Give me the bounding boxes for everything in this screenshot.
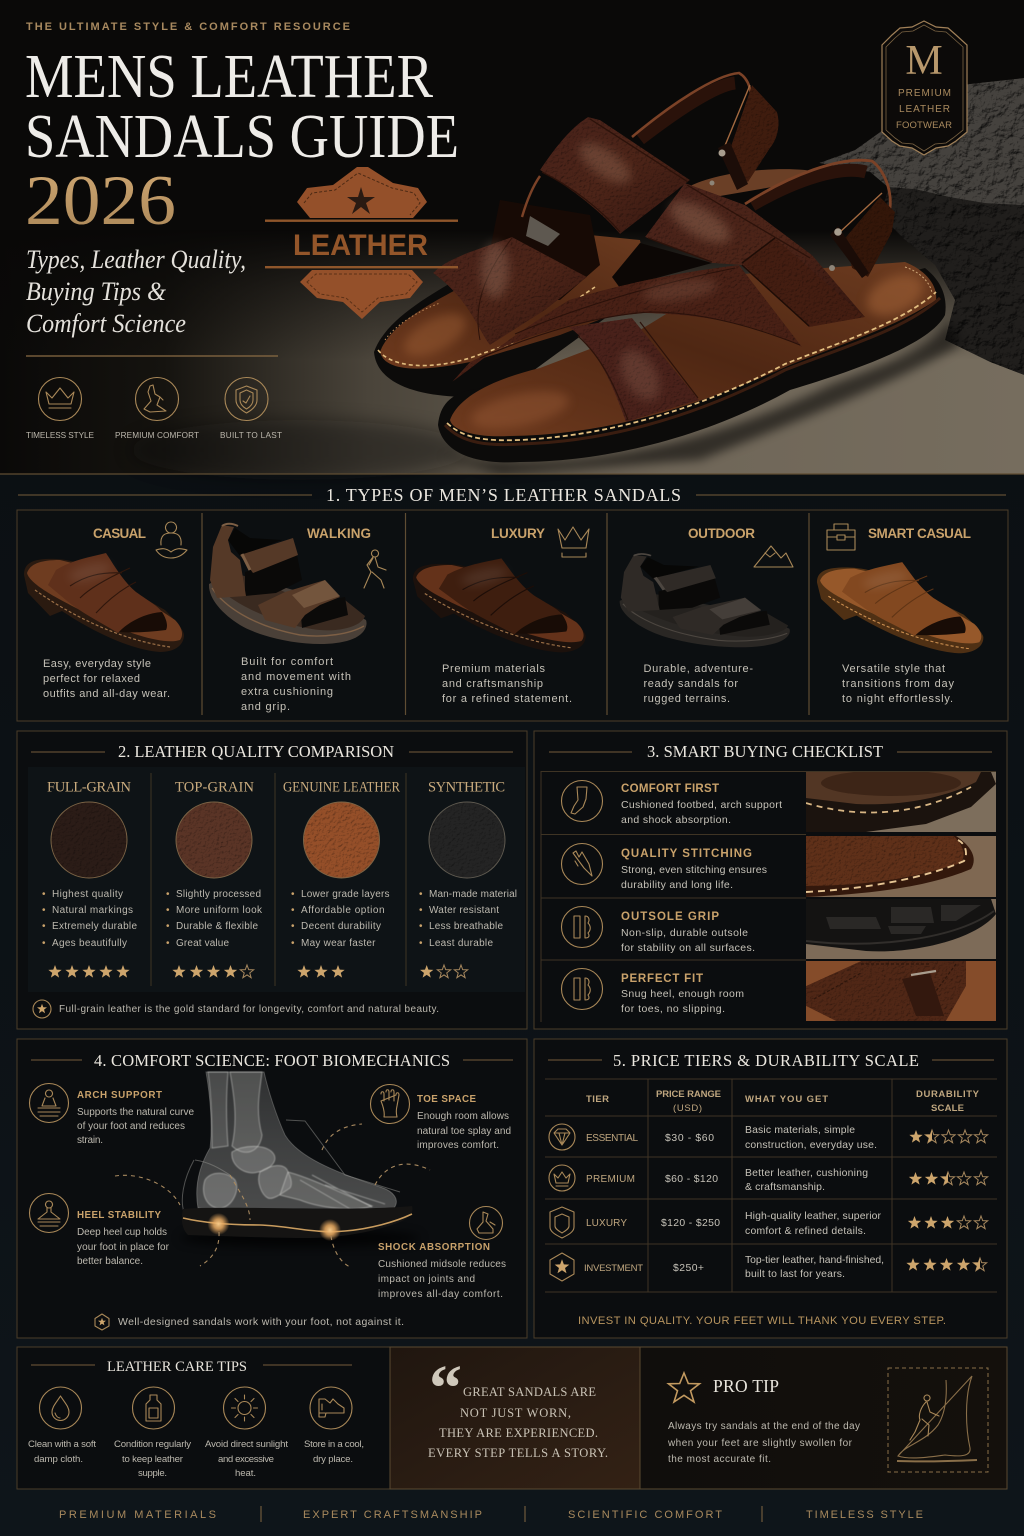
tip: store: dry place. <box>313 1454 353 1465</box>
text: luxury: Premium materials <box>442 663 546 675</box>
row: essential: Basic materials, simple <box>745 1125 855 1136</box>
bullets: genuine leather: Decent durability <box>301 921 381 932</box>
bullets: synthetic: • <box>419 921 423 932</box>
column: full-grain: FULL-GRAIN <box>47 780 132 796</box>
row: luxury: comfort & refined details. <box>745 1226 866 1237</box>
table header: PRICE RANGE <box>656 1089 721 1100</box>
callout: shock absorption <box>378 1206 506 1300</box>
sandal: walking <box>209 524 367 644</box>
bullets: synthetic: • <box>419 905 423 916</box>
text: smart casual: transitions from day <box>842 678 954 690</box>
checklist row: perfect fit: PERFECT FIT <box>621 973 703 985</box>
rock <box>819 78 1024 375</box>
callout: arch support: Supports the natural curve <box>77 1107 194 1118</box>
bullets: genuine leather: • <box>291 921 295 932</box>
bones <box>204 1072 385 1210</box>
row: investment: $250+ <box>673 1263 704 1274</box>
row: investment <box>550 1253 987 1281</box>
bullets: top-grain: More uniform look <box>176 905 263 916</box>
table header: TIER <box>586 1094 609 1105</box>
table header: (USD) <box>673 1103 702 1114</box>
note: gold standard: Full-grain leather is the gold standard for longevity, comfort and natural beauty. <box>59 1004 439 1015</box>
foot silhouette <box>197 1072 396 1215</box>
checklist row: perfect fit: for toes, no slipping. <box>621 1003 725 1015</box>
text: luxury: for a refined statement. <box>442 693 572 705</box>
panel: leather care tips <box>17 1347 390 1489</box>
row: essential: ESSENTIAL <box>586 1133 638 1144</box>
icon: needle stitch <box>562 844 602 884</box>
brand badge: LEATHER <box>899 104 950 115</box>
bullets: genuine leather: • <box>291 905 295 916</box>
icon: briefcase <box>827 524 855 550</box>
subtitle: Types, Leather Quality, <box>26 245 246 274</box>
text: casual <box>43 658 170 700</box>
tip: clean: Clean with a soft <box>28 1439 96 1450</box>
title: MENS LEATHER <box>25 43 434 111</box>
callout: toe space: improves comfort. <box>417 1140 499 1151</box>
rating: four stars <box>172 965 254 978</box>
callout: toe space <box>370 1084 511 1151</box>
brand badge: FOOTWEAR <box>896 120 952 131</box>
brand badge: PREMIUM <box>898 88 951 99</box>
heading: types: 1. TYPES OF MEN’S LEATHER SANDALS <box>326 485 681 505</box>
checklist row: perfect fit: Snug heel, enough room <box>621 988 744 1000</box>
brand badge <box>882 21 967 155</box>
hero icon labels: BUILT TO LAST <box>220 431 282 440</box>
row: luxury: High-quality leather, superior <box>745 1211 882 1222</box>
heading: pro tip: PRO TIP <box>713 1376 779 1396</box>
row: investment: Top-tier leather, hand-finished, <box>745 1255 884 1266</box>
callout: heel stability: your foot in place for <box>77 1242 170 1253</box>
tip: condition: to keep leather <box>122 1454 184 1465</box>
hero icon: shield <box>225 378 268 420</box>
year: 2026 <box>25 162 176 240</box>
note: foot <box>95 1314 404 1330</box>
quote mark: “ <box>429 1352 462 1425</box>
table header: SCALE <box>931 1103 964 1114</box>
hero icon: crown <box>38 378 82 420</box>
brand badge: M <box>905 38 943 84</box>
footer strip: EXPERT CRAFTSMANSHIP <box>303 1509 482 1521</box>
bullets: full-grain: • <box>42 938 46 949</box>
quote text: NOT JUST WORN, <box>460 1406 571 1420</box>
heading: price tiers: 5. PRICE TIERS & DURABILITY SCALE <box>613 1051 919 1070</box>
front sandal <box>438 160 946 462</box>
card: smart casual: SMART CASUAL <box>868 526 971 541</box>
text: outdoor: Durable, adventure- <box>644 663 753 675</box>
rating: three stars <box>297 965 345 978</box>
panel: quote <box>390 1347 640 1489</box>
icon: insole <box>562 968 602 1010</box>
sole <box>182 1206 412 1238</box>
hero panel <box>0 0 1024 480</box>
hero icon labels: PREMIUM COMFORT <box>115 431 199 440</box>
title: SANDALS GUIDE <box>25 103 459 171</box>
checklist row: perfect fit <box>562 961 996 1021</box>
checklist row: outsole grip <box>562 899 996 959</box>
tip: condition: Condition regularly <box>114 1439 191 1450</box>
text: luxury <box>442 663 572 705</box>
bullets: genuine leather <box>291 889 390 949</box>
text: smart casual <box>842 663 954 705</box>
heading: care tips: LEATHER CARE TIPS <box>107 1359 247 1375</box>
column: genuine leather: GENUINE LEATHER <box>283 780 400 796</box>
checklist row: quality stitching: durability and long life. <box>621 879 733 891</box>
bullets: genuine leather: Lower grade layers <box>301 889 390 900</box>
bullets: full-grain <box>42 889 137 949</box>
bullets: genuine leather: Affordable option <box>301 905 384 916</box>
icon: crown <box>558 527 589 557</box>
row: luxury: LUXURY <box>586 1218 627 1229</box>
bullets: synthetic: • <box>419 889 423 900</box>
callout: shock absorption: impact on joints and <box>378 1274 475 1285</box>
checklist row: comfort first: Cushioned footbed, arch support <box>621 799 782 811</box>
bullets: synthetic: Less breathable <box>429 921 503 932</box>
note: gold standard <box>33 1000 439 1018</box>
callout: arch support: strain. <box>77 1135 103 1146</box>
icon: relaxed person <box>156 522 187 558</box>
quote text: EVERY STEP TELLS A STORY. <box>428 1446 608 1460</box>
panel: leather quality comparison <box>17 731 527 1029</box>
note: foot: Well-designed sandals work with your foot, not against it. <box>118 1316 404 1328</box>
column: genuine leather <box>283 780 400 978</box>
sandal: outdoor <box>620 554 790 647</box>
tip: store: Store in a cool, <box>304 1439 364 1450</box>
sandal strap outline <box>182 1120 400 1212</box>
bullets: synthetic <box>419 889 517 949</box>
sandal: casual <box>24 553 184 652</box>
text: walking <box>241 656 351 713</box>
shadow <box>440 320 960 474</box>
bullets: genuine leather: May wear faster <box>301 938 376 949</box>
checklist row: comfort first: COMFORT FIRST <box>621 783 719 795</box>
card: outdoor: OUTDOOR <box>688 526 755 541</box>
quote text <box>428 1385 608 1460</box>
card: outdoor <box>620 526 793 705</box>
icon: mountains <box>754 546 793 567</box>
callout: heel stability: Deep heel cup holds <box>77 1227 167 1238</box>
checklist row: quality stitching: QUALITY STITCHING <box>621 848 752 860</box>
tip: sunlight: and excessive <box>218 1454 274 1465</box>
callout: heel stability <box>30 1194 170 1267</box>
bullets: genuine leather: • <box>291 889 295 900</box>
tagline: invest in quality: INVEST IN QUALITY. YOUR FEET WILL THANK YOU EVERY STEP. <box>578 1315 946 1327</box>
text: pro tip: when your feet are slightly swollen for <box>667 1438 853 1449</box>
card: casual: CASUAL <box>93 526 146 541</box>
callout: heel stability: better balance. <box>77 1256 143 1267</box>
checklist row: outsole grip: OUTSOLE GRIP <box>621 911 719 923</box>
swatch: top-grain <box>176 802 252 878</box>
text: smart casual: Versatile style that <box>842 663 945 675</box>
tip: sunlight: Avoid direct sunlight <box>205 1439 288 1450</box>
bullets: full-grain: • <box>42 905 46 916</box>
bullets: top-grain: Great value <box>176 938 229 949</box>
row: premium <box>549 1165 988 1193</box>
swatch: full-grain <box>51 802 127 878</box>
text: outdoor: ready sandals for <box>644 678 738 690</box>
callout: shock absorption: Cushioned midsole reduces <box>378 1259 506 1270</box>
illustration: walker on foot <box>888 1368 988 1472</box>
callout: toe space: Enough room allows <box>417 1111 509 1122</box>
card: smart casual <box>817 524 983 705</box>
text: smart casual: to night effortlessly. <box>842 693 953 705</box>
bullets: synthetic: Least durable <box>429 938 493 949</box>
bullets: full-grain: Ages beautifully <box>52 938 127 949</box>
row: essential: construction, everyday use. <box>745 1140 877 1151</box>
panel: smart buying checklist <box>534 731 1007 1029</box>
panel: types <box>17 510 1008 721</box>
rear sandal <box>374 73 814 397</box>
icon: sock foot <box>562 780 602 822</box>
footer strip: TIMELESS STYLE <box>806 1509 923 1521</box>
callout: toe space: TOE SPACE <box>417 1094 476 1105</box>
row: luxury: $120 - $250 <box>661 1218 720 1229</box>
bullets: full-grain: • <box>42 889 46 900</box>
quote text: GREAT SANDALS ARE <box>463 1385 596 1399</box>
table header <box>586 1089 980 1114</box>
panel: pro tip <box>640 1347 1007 1489</box>
checklist row: outsole grip: for stability on all surfaces. <box>621 942 755 954</box>
heading: comfort science: 4. COMFORT SCIENCE: FOOT BIOMECHANICS <box>94 1051 450 1070</box>
tip: condition: supple. <box>138 1468 167 1479</box>
row: premium: & craftsmanship. <box>745 1182 825 1193</box>
callout: shock absorption: improves all-day comfort. <box>378 1289 503 1300</box>
row: essential <box>549 1124 988 1151</box>
footer strip: PREMIUM MATERIALS <box>59 1509 216 1521</box>
bullets: full-grain: Extremely durable <box>52 921 137 932</box>
footer strip: SCIENTIFIC COMFORT <box>568 1509 722 1521</box>
checklist row: quality stitching: Strong, even stitching ensures <box>621 864 767 876</box>
row: investment: built to last for years. <box>745 1269 845 1280</box>
footer strip <box>59 1506 923 1522</box>
title <box>25 43 459 171</box>
rating: one star <box>420 965 468 978</box>
bullets: synthetic: • <box>419 938 423 949</box>
column: synthetic <box>419 780 517 978</box>
subtitle: Comfort Science <box>26 309 186 338</box>
swatch: synthetic <box>429 802 505 878</box>
photo: stitching <box>806 836 996 897</box>
row: investment: INVESTMENT <box>584 1263 643 1274</box>
bullets: top-grain: • <box>166 938 170 949</box>
sandal: luxury <box>413 558 586 652</box>
tip: store <box>304 1387 364 1465</box>
card: walking <box>209 524 386 713</box>
bullets: full-grain: • <box>42 921 46 932</box>
tip: clean <box>28 1387 96 1465</box>
bullets: top-grain: • <box>166 905 170 916</box>
text: pro tip <box>667 1421 860 1465</box>
icon: star <box>668 1373 700 1402</box>
table header: WHAT YOU GET <box>745 1094 828 1105</box>
bullets: full-grain: Natural markings <box>52 905 133 916</box>
eyebrow: THE ULTIMATE STYLE & COMFORT RESOURCE <box>26 21 350 33</box>
callout: arch support <box>30 1084 194 1146</box>
card: luxury: LUXURY <box>491 526 545 541</box>
text: pro tip: the most accurate fit. <box>668 1454 771 1465</box>
row: essential: $30 - $60 <box>665 1133 714 1144</box>
checklist row: quality stitching <box>562 836 996 897</box>
photo: cushioned footbed <box>806 772 996 832</box>
quote text: THEY ARE EXPERIENCED. <box>439 1426 598 1440</box>
bullets: genuine leather: • <box>291 938 295 949</box>
text: outdoor: rugged terrains. <box>644 693 730 705</box>
text: pro tip: Always try sandals at the end of the day <box>668 1421 860 1432</box>
bullets: synthetic: Water resistant <box>429 905 499 916</box>
tip: sunlight <box>205 1387 288 1479</box>
tip: clean: damp cloth. <box>34 1454 83 1465</box>
bullets: top-grain: Slightly processed <box>176 889 261 900</box>
tip: sunlight: heat. <box>235 1468 256 1479</box>
bullets: top-grain <box>166 889 263 949</box>
heading: checklist: 3. SMART BUYING CHECKLIST <box>647 742 883 761</box>
bullets: top-grain: • <box>166 889 170 900</box>
text: casual: perfect for relaxed <box>43 673 140 685</box>
icon: outsole <box>562 906 602 948</box>
text: luxury: and craftsmanship <box>442 678 543 690</box>
glow points <box>208 1213 230 1235</box>
bullets: synthetic: Man-made material <box>429 889 517 900</box>
photo: tread <box>806 899 996 959</box>
panel: comfort science <box>17 1039 527 1338</box>
heading: leather quality: 2. LEATHER QUALITY COMPARISON <box>118 742 394 761</box>
subtitle <box>26 245 246 338</box>
dashed callout arcs <box>115 1124 430 1267</box>
tip: condition <box>114 1387 191 1479</box>
checklist row: comfort first <box>562 770 996 832</box>
photo: buckle <box>806 961 996 1021</box>
callout: arch support: of your foot and reduces <box>77 1121 185 1132</box>
row: premium: PREMIUM <box>586 1174 635 1185</box>
text: walking: extra cushioning <box>241 686 333 698</box>
bullets: top-grain: • <box>166 921 170 932</box>
column: top-grain <box>166 780 263 978</box>
text: outdoor <box>644 663 753 705</box>
icon: walker <box>364 550 386 588</box>
text: walking: Built for comfort <box>241 656 333 668</box>
leather badge <box>265 167 458 319</box>
text: casual: Easy, everyday style <box>43 658 151 670</box>
bullets: top-grain: Durable & flexible <box>176 921 258 932</box>
column: synthetic: SYNTHETIC <box>428 780 505 796</box>
hero icon: foot <box>136 378 178 420</box>
diagram: foot biomechanics <box>115 1072 430 1267</box>
row: luxury <box>550 1207 988 1238</box>
hero sandals <box>374 73 960 474</box>
table header: DURABILITY <box>916 1089 980 1100</box>
row: premium: $60 - $120 <box>665 1174 718 1185</box>
text: walking: and movement with <box>241 671 351 683</box>
card: luxury <box>413 526 589 705</box>
section 1: types of sandals <box>17 485 1008 721</box>
callout: arch support: ARCH SUPPORT <box>77 1090 162 1101</box>
table: price tiers <box>545 1079 997 1292</box>
rating: five stars <box>48 965 130 978</box>
callout: toe space: natural toe splay and <box>417 1126 511 1137</box>
checklist row: outsole grip: Non-slip, durable outsole <box>621 927 748 939</box>
subtitle: Buying Tips & <box>26 277 167 306</box>
swatch: genuine leather <box>304 802 380 878</box>
bullets: full-grain: Highest quality <box>52 889 123 900</box>
row: premium: Better leather, cushioning <box>745 1168 868 1179</box>
panel: price tiers <box>534 1039 1007 1338</box>
hero icon labels <box>26 431 282 440</box>
column: full-grain <box>42 780 137 978</box>
checklist row: comfort first: and shock absorption. <box>621 814 731 826</box>
callout: shock absorption: SHOCK ABSORPTION <box>378 1242 490 1253</box>
leather badge: LEATHER <box>293 229 428 262</box>
callout: heel stability: HEEL STABILITY <box>77 1210 161 1221</box>
text: walking: and grip. <box>241 701 290 713</box>
sandal: smart casual <box>817 562 983 653</box>
card: walking: WALKING <box>307 526 371 541</box>
hero icon labels: TIMELESS STYLE <box>26 431 95 440</box>
text: casual: outfits and all-day wear. <box>43 688 170 700</box>
column: top-grain: TOP-GRAIN <box>175 780 255 796</box>
card: casual <box>24 522 187 700</box>
